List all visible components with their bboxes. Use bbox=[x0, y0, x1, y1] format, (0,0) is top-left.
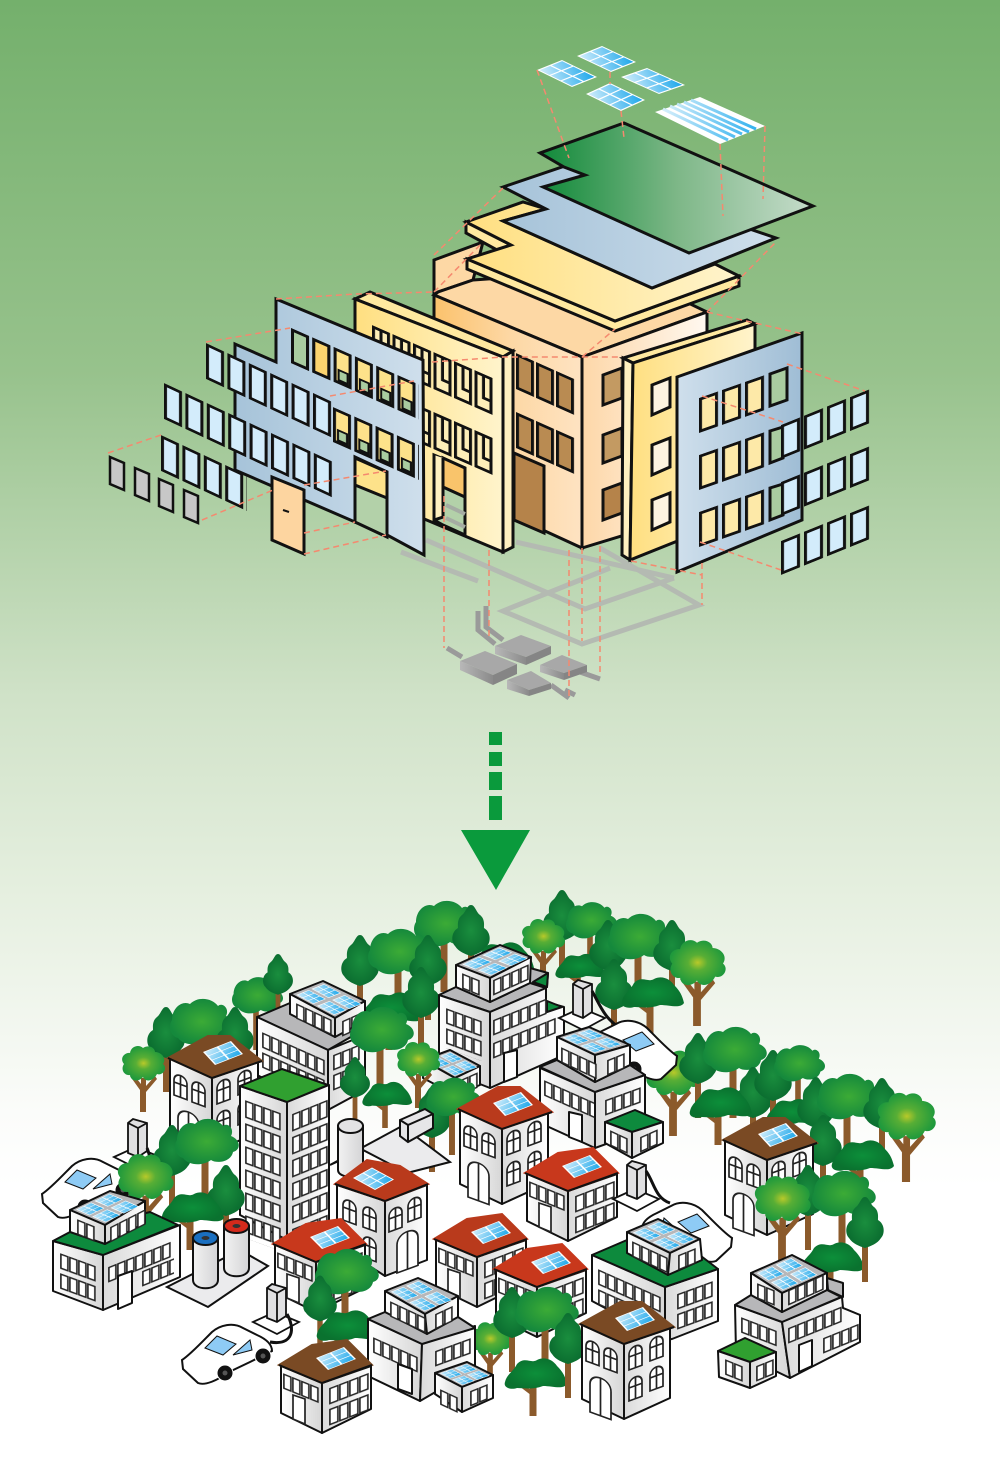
underground pipes bbox=[401, 497, 699, 698]
brown house right bbox=[723, 1118, 817, 1236]
solar thermal collector bbox=[655, 97, 765, 144]
charging post with car, upper left bbox=[42, 1119, 160, 1218]
charging post with electric car, upper centre bbox=[559, 980, 677, 1080]
right foreground trees bbox=[755, 1165, 884, 1300]
far right office with penthouse and green annex bbox=[718, 1255, 860, 1388]
charging post with car, lower left bbox=[182, 1284, 299, 1384]
storage tanks on platform bbox=[167, 1219, 268, 1307]
green city district bbox=[42, 890, 936, 1433]
front-left office with green roof bbox=[53, 1191, 180, 1310]
trees left of tower bbox=[118, 1119, 245, 1250]
front trees at centre-left bbox=[303, 1249, 511, 1385]
central tall office with solar roof bbox=[439, 945, 564, 1088]
red office house lower centre bbox=[434, 1214, 527, 1307]
transition arrow bbox=[461, 732, 530, 890]
red office house left bbox=[273, 1219, 366, 1312]
red office house bbox=[525, 1148, 618, 1241]
red arched house centre bbox=[458, 1087, 552, 1205]
grey shutters bbox=[110, 457, 198, 523]
outer blue wall right bbox=[677, 333, 802, 572]
green roof layer bbox=[540, 123, 813, 253]
exploded building diagram bbox=[108, 46, 873, 700]
charging post with car, right bbox=[613, 1161, 732, 1262]
office with green roof and solar penthouse bbox=[592, 1219, 718, 1340]
dashed assembly guide lines bbox=[108, 70, 865, 700]
platform with grey tank and unit bbox=[330, 1109, 450, 1177]
red house front centre bbox=[494, 1244, 587, 1337]
floating windows left bbox=[161, 343, 335, 511]
floating windows right bbox=[781, 388, 873, 575]
blue insulation roof layer bbox=[503, 166, 776, 288]
front trees at centre bbox=[493, 1287, 587, 1416]
brown house lower left bbox=[279, 1340, 372, 1433]
small solar roof annex bbox=[423, 1050, 480, 1096]
back row of trees bbox=[122, 890, 936, 1200]
brown house front bbox=[580, 1302, 674, 1420]
red hot water tank bbox=[224, 1219, 249, 1276]
red arched house bbox=[335, 1160, 428, 1276]
heating machinery bbox=[460, 635, 587, 696]
main building block bbox=[434, 242, 707, 548]
blue cold water tank bbox=[193, 1231, 218, 1288]
right yellow wall bbox=[622, 320, 755, 560]
yellow roof layer bbox=[466, 202, 739, 331]
middle yellow wall left bbox=[355, 292, 513, 552]
centre trees bbox=[340, 1007, 481, 1172]
brown house upper left bbox=[168, 1036, 262, 1154]
solar panels bbox=[537, 46, 765, 144]
outer blue wall left bbox=[235, 299, 424, 555]
door bbox=[272, 477, 304, 554]
office with solar penthouse and annex, front centre bbox=[368, 1278, 493, 1413]
office with solar penthouse right of centre bbox=[540, 1027, 663, 1158]
green roof tower bbox=[240, 1069, 329, 1252]
back-left office building bbox=[257, 981, 365, 1110]
